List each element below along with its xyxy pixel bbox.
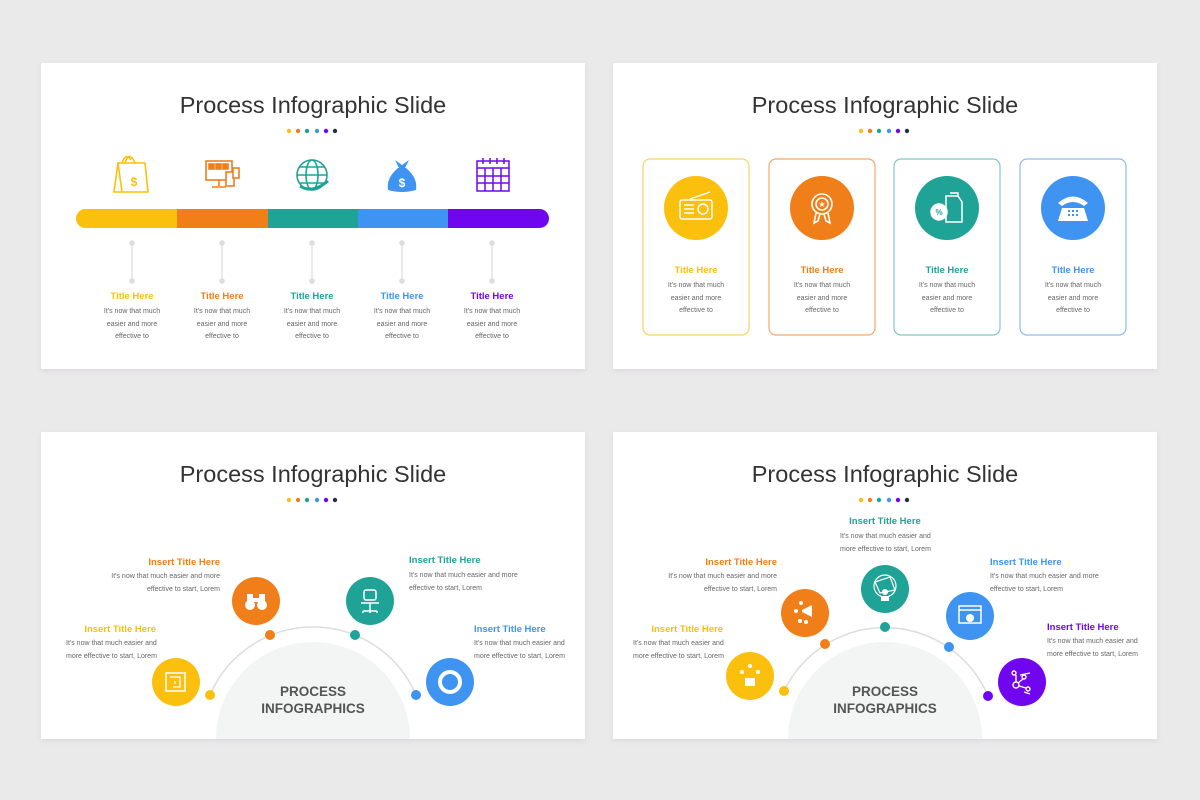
icon: computer (206, 161, 239, 187)
title: slide 1: Process Infographic Slide (180, 92, 446, 118)
text blocks: slide 4: It's now that much easier and (633, 640, 724, 647)
center label: INFOGRAPHICS (261, 701, 365, 716)
dots: slide 2 (859, 129, 909, 133)
card: orange badge: Title Here (800, 265, 844, 276)
text blocks: slide 4 (633, 516, 1138, 660)
text blocks: slide 1: Title Here (200, 291, 244, 302)
card: blue phone: Title Here (1051, 265, 1095, 276)
text blocks: slide 1 (104, 291, 520, 340)
arc dots (205, 630, 421, 700)
panel: slide 3 semicircle 4 steps (41, 432, 585, 741)
bar: timeline (76, 209, 549, 228)
card: teal discount (894, 159, 1000, 335)
text blocks: slide 1: effective to (205, 333, 239, 340)
text blocks: slide 1: effective to (115, 333, 149, 340)
step circles (726, 565, 1046, 706)
card: teal discount: effective to (930, 307, 964, 314)
text blocks: slide 1: effective to (475, 333, 509, 340)
center label: PROCESS (852, 684, 918, 699)
center label: PROCESS (280, 684, 346, 699)
text blocks: slide 3: effective to start, Lorem (147, 586, 220, 593)
text blocks: slide 4: It's now that much easier and (1047, 638, 1138, 645)
text blocks: slide 4: Insert Title Here (705, 557, 777, 568)
panel: slide 2 cards (613, 63, 1157, 369)
center semicircle (212, 626, 414, 739)
card: yellow radio: It's now that much (668, 282, 724, 289)
step circles (152, 577, 474, 706)
text blocks: slide 1: easier and more (377, 321, 427, 328)
card: blue phone: It's now that much (1045, 282, 1101, 289)
title: slide 4: Process Infographic Slide (752, 461, 1018, 487)
dots: slide 1 (287, 129, 337, 133)
text blocks: slide 3: Insert Title Here (84, 624, 156, 635)
icon: money bag: $ (399, 176, 406, 190)
card: yellow radio: Title Here (674, 265, 718, 276)
text blocks: slide 3: It's now that much easier and (474, 640, 565, 647)
text blocks: slide 4: Insert Title Here (849, 516, 921, 527)
text blocks: slide 4: Insert Title Here (651, 624, 723, 635)
card: teal discount: % (935, 208, 943, 217)
panel: slide 1 timeline (41, 63, 585, 369)
connectors (130, 241, 494, 283)
text blocks: slide 3: It's now that much easier and (66, 640, 157, 647)
text blocks: slide 1: easier and more (467, 321, 517, 328)
icon: money bag (388, 160, 416, 192)
text blocks: slide 1: It's now that much (104, 308, 160, 315)
text blocks: slide 1: It's now that much (284, 308, 340, 315)
text blocks: slide 3: It's now that much easier and more (409, 572, 518, 579)
text blocks: slide 4: effective to start, Lorem (990, 586, 1063, 593)
text blocks: slide 3 (66, 555, 565, 660)
text blocks: slide 4: It's now that much easier and more (990, 573, 1099, 580)
card: yellow radio (643, 159, 749, 335)
center label (261, 684, 365, 716)
card: orange badge: effective to (805, 307, 839, 314)
card: blue phone (1020, 159, 1126, 335)
arc dots (779, 622, 993, 701)
icon: shopping bag: $ (131, 175, 138, 189)
icon: calendar (477, 158, 509, 191)
text blocks: slide 1: effective to (385, 333, 419, 340)
text blocks: slide 4: It's now that much easier and (840, 533, 931, 540)
text blocks: slide 4: It's now that much easier and more (668, 573, 777, 580)
text blocks: slide 4: more effective to start, Lorem (633, 653, 724, 660)
title: slide 2: Process Infographic Slide (752, 92, 1018, 118)
text blocks: slide 1: Title Here (470, 291, 514, 302)
card: yellow radio: easier and more (671, 295, 721, 302)
card: teal discount: easier and more (922, 295, 972, 302)
text blocks: slide 1: Title Here (380, 291, 424, 302)
text blocks: slide 1: easier and more (197, 321, 247, 328)
text blocks: slide 1: effective to (295, 333, 329, 340)
center semicircle (786, 627, 986, 739)
text blocks: slide 1: easier and more (287, 321, 337, 328)
card: blue phone: easier and more (1048, 295, 1098, 302)
icon: shopping bag (114, 156, 148, 192)
panel: slide 4 semicircle 5 steps (613, 432, 1157, 741)
dots: slide 4 (859, 498, 909, 502)
center label: INFOGRAPHICS (833, 701, 937, 716)
card: blue phone: effective to (1056, 307, 1090, 314)
card: teal discount: It's now that much (919, 282, 975, 289)
dots: slide 3 (287, 498, 337, 502)
text blocks: slide 3: more effective to start, Lorem (66, 653, 157, 660)
title: slide 3: Process Infographic Slide (180, 461, 446, 487)
text blocks: slide 4: effective to start, Lorem (704, 586, 777, 593)
text blocks: slide 4: Insert Title Here (990, 557, 1062, 568)
card: orange badge: ★ (818, 200, 826, 209)
text blocks: slide 3: more effective to start, Lorem (474, 653, 565, 660)
text blocks: slide 1: It's now that much (464, 308, 520, 315)
text blocks: slide 1: easier and more (107, 321, 157, 328)
icon: globe (297, 160, 328, 190)
text blocks: slide 1: It's now that much (194, 308, 250, 315)
card: orange badge (769, 159, 875, 335)
text blocks: slide 3: Insert Title Here (148, 557, 220, 568)
text blocks: slide 3: It's now that much easier and more (111, 573, 220, 580)
text blocks: slide 4: Insert Title Here (1047, 622, 1119, 633)
text blocks: slide 3: effective to start, Lorem (409, 585, 482, 592)
text blocks: slide 4: more effective to start, Lorem (1047, 651, 1138, 658)
card: teal discount: Title Here (925, 265, 969, 276)
card: orange badge: easier and more (797, 295, 847, 302)
text blocks: slide 1: It's now that much (374, 308, 430, 315)
card: orange badge: It's now that much (794, 282, 850, 289)
text blocks: slide 3: Insert Title Here (409, 555, 481, 566)
text blocks: slide 4: more effective to start, Lorem (840, 546, 931, 553)
card: yellow radio: effective to (679, 307, 713, 314)
text blocks: slide 1: Title Here (290, 291, 334, 302)
center label (833, 684, 937, 716)
text blocks: slide 1: Title Here (110, 291, 154, 302)
text blocks: slide 3: Insert Title Here (474, 624, 546, 635)
